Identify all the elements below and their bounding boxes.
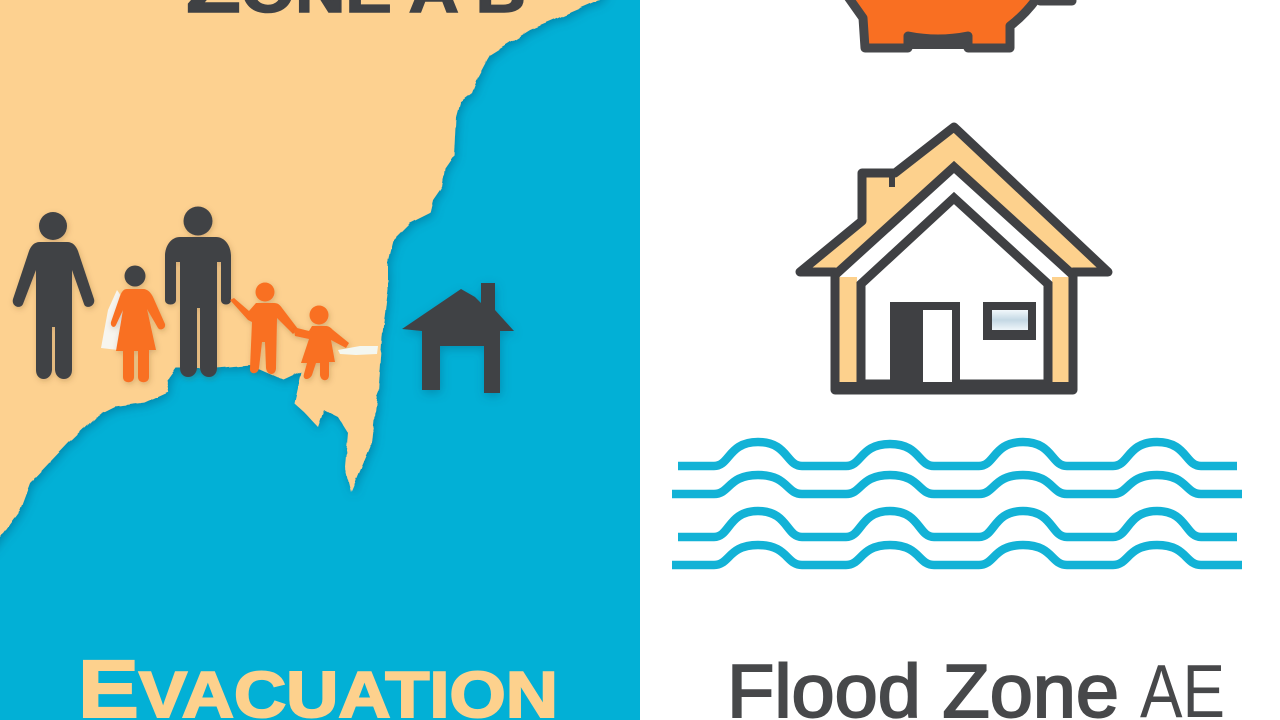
panel: evacuation map	[0, 0, 640, 720]
panel background	[640, 0, 1280, 720]
icon: adult figure centre	[165, 206, 231, 377]
icon: woman figure	[111, 266, 165, 382]
inner chevron walls	[861, 198, 1048, 384]
side bands	[840, 277, 1068, 382]
icon: boy figure	[230, 282, 298, 374]
panel: flood zone	[640, 0, 1280, 720]
water background	[0, 0, 640, 720]
chimney notch	[889, 176, 895, 187]
inner white wall	[840, 170, 1068, 382]
land mass	[0, 0, 612, 560]
icon: adult figure left	[13, 212, 94, 379]
house outer shell	[800, 127, 1108, 390]
white paper strip	[338, 346, 378, 355]
icon: house	[800, 127, 1108, 394]
door	[890, 302, 960, 386]
window	[983, 302, 1036, 340]
icon: dark house	[402, 283, 514, 393]
icon: girl figure	[294, 306, 349, 380]
roof underside line	[835, 167, 1073, 275]
icon: white bag	[101, 290, 124, 350]
icon: flood waves	[672, 442, 1242, 565]
icon: piggy bank	[846, 0, 1072, 49]
base line	[835, 382, 1073, 394]
